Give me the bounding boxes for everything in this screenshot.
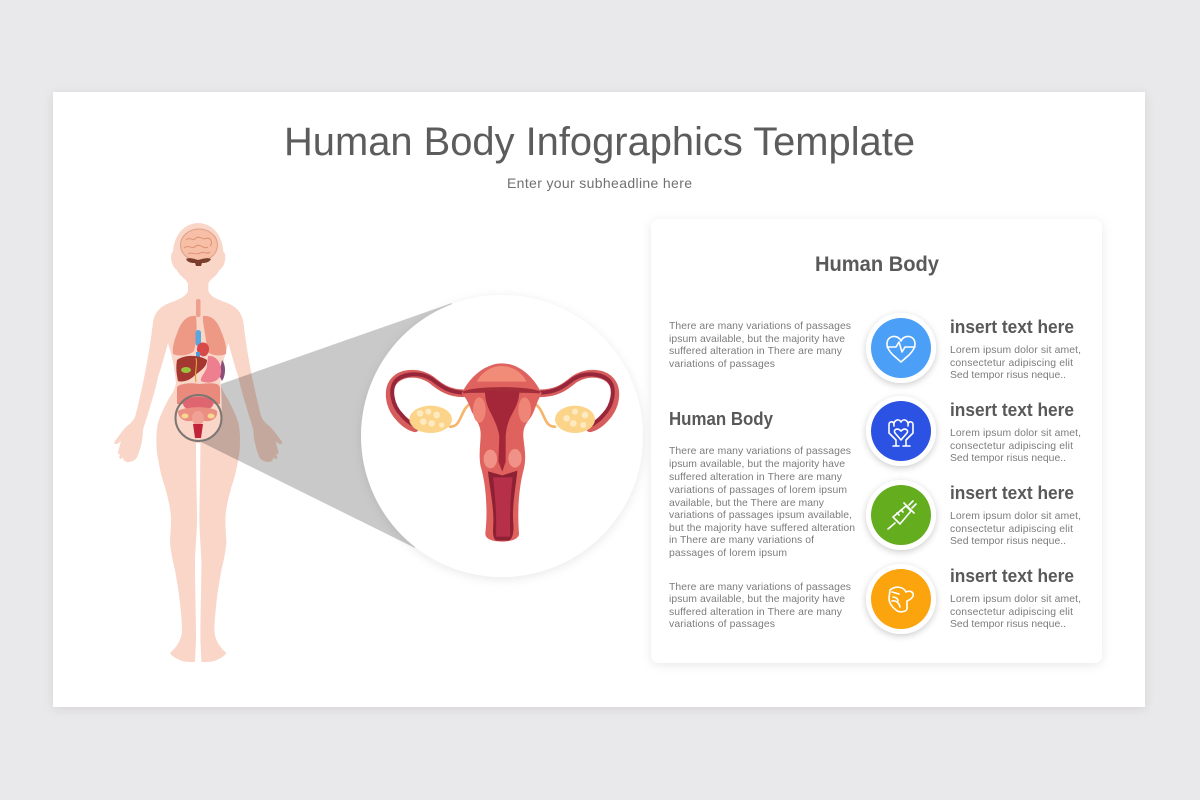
left text block 2: passages of lorem ipsum <box>669 548 787 559</box>
human body figure <box>114 223 282 662</box>
left text block 2 <box>669 446 855 559</box>
left text block 3: suffered alteration in There are many <box>669 607 843 618</box>
item 3 text <box>950 511 1081 547</box>
magnifier ring <box>176 395 222 441</box>
left text block 1: ipsum available, but the majority have <box>669 334 845 345</box>
item 4 text: consectetur adipiscing elit <box>950 607 1073 618</box>
icon: syringe <box>866 480 936 550</box>
left heading: Human Body <box>669 409 773 429</box>
left text block 3 <box>669 582 851 630</box>
title: Human Body Infographics Template <box>284 120 915 164</box>
left text block 3: There are many variations of passages <box>669 582 851 593</box>
icon: heart pulse <box>866 313 936 383</box>
left text block 2: suffered alteration in There are many <box>669 472 843 483</box>
left text block 3: ipsum available, but the majority have <box>669 594 845 605</box>
left text block 2: but the majority have suffered alteration <box>669 523 855 534</box>
liver and stomach <box>176 356 225 383</box>
item 2 <box>866 396 1081 466</box>
item 1 text: Sed tempor risus neque.. <box>950 370 1066 381</box>
item 1 <box>866 313 1081 383</box>
item 1 text: consectetur adipiscing elit <box>950 358 1073 369</box>
item 4 text: Lorem ipsum dolor sit amet, <box>950 594 1081 605</box>
circle background <box>361 295 643 577</box>
item 3 <box>866 480 1081 550</box>
body silhouette <box>114 223 282 662</box>
left text block 2: There are many variations of passages <box>669 446 851 457</box>
item 2 text <box>950 428 1081 464</box>
intestines <box>177 383 220 404</box>
slide panel <box>53 92 1145 707</box>
left text block 3: variations of passages <box>669 619 775 630</box>
left text block 1: suffered alteration in There are many <box>669 346 843 357</box>
item 4 <box>866 564 1081 634</box>
item 2 text: Sed tempor risus neque.. <box>950 453 1066 464</box>
left text block 1: variations of passages <box>669 359 775 370</box>
trachea <box>196 299 200 317</box>
item 2 text: consectetur adipiscing elit <box>950 441 1073 452</box>
left text block 2: variations of passages ipsum available, <box>669 510 852 521</box>
left text block 2: available, but the There are many <box>669 498 825 509</box>
item 3 heading: insert text here <box>950 483 1074 503</box>
item 2 heading: insert text here <box>950 400 1074 420</box>
left text block 1 <box>669 321 851 370</box>
item 4 text <box>950 594 1081 630</box>
lungs <box>173 316 226 355</box>
card heading: Human Body <box>815 253 939 276</box>
zoom cone <box>201 303 452 548</box>
panel: card <box>651 219 1102 663</box>
item 3 text: Sed tempor risus neque.. <box>950 536 1066 547</box>
item 1 text: Lorem ipsum dolor sit amet, <box>950 345 1081 356</box>
uterus illustration <box>390 363 615 542</box>
item 2 text: Lorem ipsum dolor sit amet, <box>950 428 1081 439</box>
item 3 text: consectetur adipiscing elit <box>950 524 1073 535</box>
item 4 text: Sed tempor risus neque.. <box>950 619 1066 630</box>
item 4 heading: insert text here <box>950 566 1074 586</box>
item 1 text <box>950 345 1081 381</box>
icon: hands holding heart <box>866 396 936 466</box>
icon: organ <box>866 564 936 634</box>
brain <box>180 229 218 266</box>
left text block 2: ipsum available, but the majority have <box>669 459 845 470</box>
item 3 text: Lorem ipsum dolor sit amet, <box>950 511 1081 522</box>
small organs in the ring <box>178 397 217 438</box>
zoomed circle <box>361 295 643 577</box>
subtitle: Enter your subheadline here <box>507 175 692 191</box>
left text block 2: in There are many variations of <box>669 535 814 546</box>
left text block 1: There are many variations of passages <box>669 321 851 332</box>
left text block 2: variations of passages of lorem ipsum <box>669 485 847 496</box>
item 1 heading: insert text here <box>950 317 1074 337</box>
heart <box>196 330 209 358</box>
